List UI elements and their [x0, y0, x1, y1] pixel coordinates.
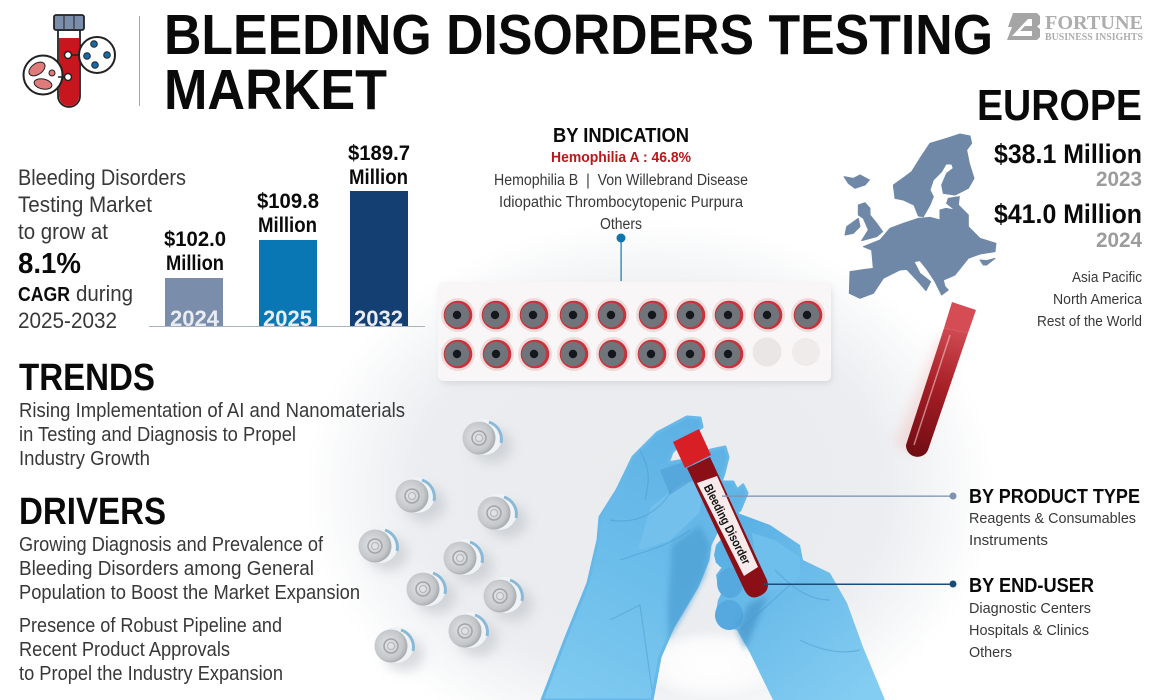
panel: by product type: Reagents & Consumables: [969, 510, 1136, 527]
bar: 2025: 2025: [263, 306, 312, 331]
text: CAGR summary: [18, 165, 186, 333]
panel: by end-user: Others: [969, 644, 1012, 661]
panel: by end-user: BY END-USER: [969, 575, 1095, 597]
text: drivers: Recent Product Approvals: [19, 639, 230, 661]
panel: by product type: Instruments: [969, 532, 1048, 549]
panel: Europe figures: 2024: [1096, 229, 1142, 252]
text: drivers: Growing Diagnosis and Prevalence of: [19, 534, 323, 556]
panel: by indication: [494, 125, 748, 233]
map: Europe: [844, 134, 996, 298]
text: CAGR summary: during: [76, 281, 133, 306]
panel: by indication: Hemophilia A : 46.8%: [551, 150, 691, 166]
text: drivers: to Propel the Industry Expansion: [19, 663, 283, 685]
panel: by end-user: [763, 575, 1095, 661]
photo: sample rack: [438, 282, 832, 384]
panel: Europe figures: Asia Pacific: [1072, 269, 1142, 286]
panel: Europe figures: Rest of the World: [1037, 313, 1142, 330]
photo: blood collection tube: [895, 302, 976, 457]
photo: vials: [358, 419, 533, 671]
logo: Fortune Business Insights: [1007, 12, 1143, 43]
bar: 2032: [348, 142, 410, 331]
bar: 2032: $189.7: [348, 142, 410, 165]
icon: test tube with blood cells: [24, 15, 115, 107]
text: CAGR summary: Bleeding Disorders: [18, 165, 186, 190]
text: CAGR summary: to grow at: [18, 219, 108, 244]
panel: Europe figures: $38.1 Million: [994, 139, 1142, 169]
text: CAGR summary: 2025-2032: [18, 308, 117, 333]
text: trends: in Testing and Diagnosis to Propel: [19, 424, 296, 446]
panel: Europe figures: $41.0 Million: [994, 199, 1142, 229]
bar chart: [149, 142, 425, 331]
text: drivers: Population to Boost the Market Expansion: [19, 582, 360, 604]
panel: Europe figures: EUROPE: [977, 81, 1142, 130]
tube with label: [673, 429, 768, 597]
text: CAGR summary: CAGR: [18, 284, 70, 306]
tube label text: Bleeding Disorder: [701, 482, 753, 567]
title: MARKET: [164, 58, 387, 122]
bar: 2024: $102.0: [164, 228, 226, 251]
bar: 2024: Million: [166, 252, 224, 275]
logo: Fortune Business Insights: BUSINESS INSIGHTS: [1045, 32, 1143, 43]
text: trends: Rising Implementation of AI and Nanomaterials: [19, 400, 405, 422]
bar: 2025: Million: [258, 214, 317, 237]
bar: 2025: $109.8: [257, 190, 319, 213]
panel: by product type: [722, 486, 1140, 549]
bar: 2025: [257, 190, 319, 331]
panel: by indication: BY INDICATION: [553, 125, 689, 147]
text: drivers: DRIVERS: [19, 491, 166, 533]
text: trends: [19, 357, 405, 470]
left glove: [542, 417, 747, 700]
panel: by product type: BY PRODUCT TYPE: [969, 486, 1140, 508]
bar: 2024: [164, 228, 226, 331]
panel: by end-user: Hospitals & Clinics: [969, 622, 1089, 639]
panel: by end-user: Diagnostic Centers: [969, 600, 1091, 617]
panel: Europe figures: 2023: [1096, 168, 1142, 191]
text: trends: TRENDS: [19, 357, 155, 399]
connector: by indication: [616, 234, 626, 281]
panel: by indication: Others: [600, 216, 642, 233]
text: drivers: Presence of Robust Pipeline and: [19, 615, 282, 637]
text: drivers: [19, 491, 360, 685]
panel: by indication: Idiopathic Thrombocytopenic Purpura: [499, 194, 743, 211]
title: BLEEDING DISORDERS TESTING: [164, 3, 993, 67]
right glove: [714, 512, 885, 700]
text: trends: Industry Growth: [19, 448, 150, 470]
panel: Europe figures: North America: [1053, 291, 1143, 308]
panel: Europe figures: [977, 81, 1143, 330]
text: CAGR summary: Testing Market: [18, 192, 152, 217]
panel: by indication: Hemophilia B | Von Willebrand Disease: [494, 172, 748, 189]
bar: 2032: 2032: [354, 306, 403, 331]
photo: gloved hands holding tube: [542, 417, 885, 700]
bar: 2032: Million: [349, 166, 408, 189]
bar: 2024: 2024: [170, 306, 219, 331]
title: [164, 3, 993, 122]
text: drivers: Bleeding Disorders among General: [19, 558, 314, 580]
text: CAGR summary: 8.1%: [18, 248, 81, 280]
logo: Fortune Business Insights: FORTUNE: [1045, 12, 1143, 34]
